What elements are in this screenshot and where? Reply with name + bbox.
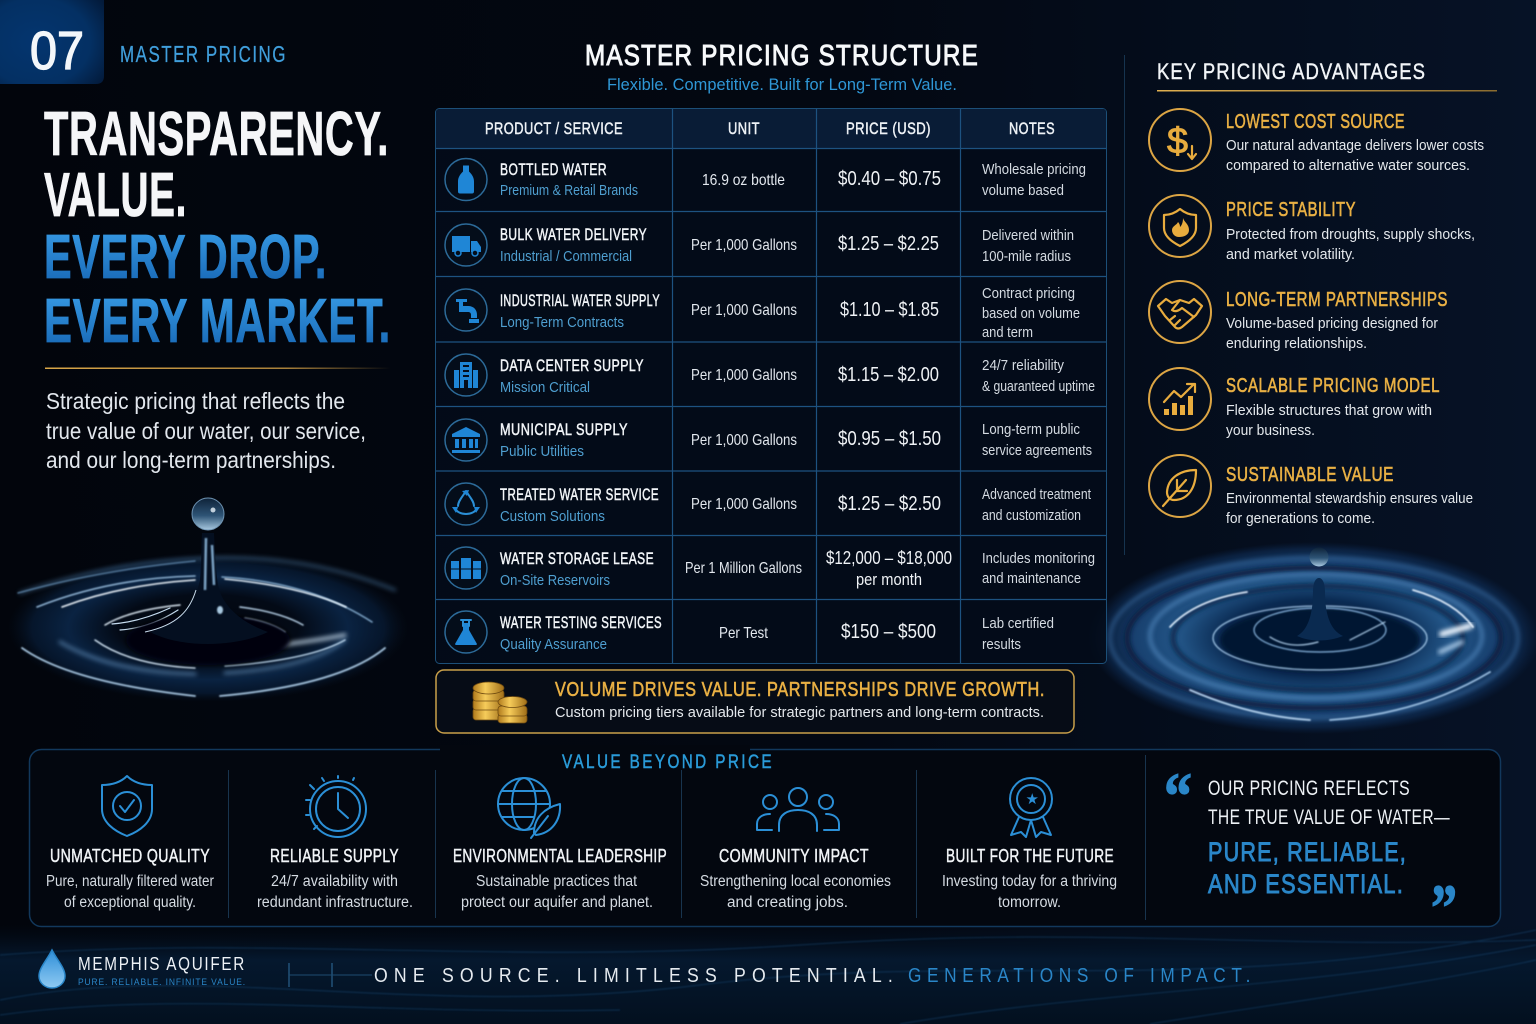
value: community impact: Strengthening local economies: [700, 873, 891, 890]
value: reliable supply: 24/7 availability with: [271, 873, 398, 890]
row: water testing services: Quality Assurance: [500, 636, 607, 653]
value: unmatched quality: Pure, naturally filtered water: [46, 873, 214, 890]
value: community impact: and creating jobs.: [727, 894, 848, 911]
row: data center supply: DATA CENTER SUPPLY: [500, 357, 644, 375]
advantage: lowest cost source: Our natural advantage delivers lower costs: [1226, 137, 1484, 154]
icon: gold coins: [473, 682, 527, 723]
callout: volume drives value: Custom pricing tiers available for strategic partners and long-term contracts.: [555, 704, 1044, 721]
footer logo: [39, 950, 246, 988]
intro paragraph: true value of our water, our service,: [46, 418, 366, 444]
intro paragraph: Strategic pricing that reflects the: [46, 388, 345, 414]
table header: UNIT: [728, 120, 760, 138]
main headline: VALUE.: [44, 161, 187, 230]
row: data center supply: $1.15 – $2.00: [838, 364, 939, 386]
advantage: price stability: [1149, 195, 1475, 263]
advantage: scalable pricing model: SCALABLE PRICING MODEL: [1226, 375, 1440, 397]
main headline: EVERY MARKET.: [44, 287, 391, 356]
row: bulk water delivery: 100-mile radius: [982, 249, 1071, 265]
row: water testing services: results: [982, 637, 1021, 653]
table header: PRICE (USD): [846, 120, 931, 138]
value: community impact: [700, 788, 891, 911]
row: municipal supply: [445, 419, 1092, 461]
row: municipal supply: service agreements: [982, 443, 1092, 459]
row: bulk water delivery: Industrial / Commercial: [500, 248, 632, 265]
footer tagline: ONE SOURCE. LIMITLESS POTENTIAL.: [374, 965, 899, 987]
row: water storage lease: $12,000 – $18,000: [826, 548, 952, 568]
row: industrial water supply: INDUSTRIAL WATER SUPPLY: [500, 292, 660, 310]
main headline: [44, 100, 391, 356]
row: data center supply: 24/7 reliability: [982, 358, 1065, 374]
row: treated water service: [445, 483, 1091, 525]
row: industrial water supply: $1.10 – $1.85: [840, 299, 939, 321]
row: water storage lease: [445, 547, 1095, 589]
section number badge: 07: [30, 21, 84, 81]
row: treated water service: Per 1,000 Gallons: [691, 496, 797, 513]
row: treated water service: $1.25 – $2.50: [838, 493, 941, 515]
row: bottled water: Premium & Retail Brands: [500, 182, 638, 199]
table header: [485, 120, 1055, 138]
quote: OUR PRICING REFLECTS: [1208, 777, 1410, 800]
callout: volume drives value: VOLUME DRIVES VALUE. PARTNERSHIPS DRIVE GROWTH.: [555, 679, 1045, 701]
row: water testing services: WATER TESTING SERVICES: [500, 614, 662, 632]
row: data center supply: [445, 354, 1095, 396]
value: built for the future: ★: [1026, 791, 1039, 808]
icon: globe and leaf: [498, 778, 560, 838]
panel: key pricing advantages: [1149, 59, 1497, 527]
center title: MASTER PRICING STRUCTURE: [585, 40, 979, 72]
value: unmatched quality: UNMATCHED QUALITY: [50, 846, 210, 866]
row: water storage lease: On-Site Reservoirs: [500, 572, 610, 589]
row: bulk water delivery: Per 1,000 Gallons: [691, 237, 797, 254]
panel: key pricing advantages: KEY PRICING ADVANTAGES: [1157, 59, 1426, 84]
icon: bottle: [445, 158, 487, 200]
value: environmental leadership: [453, 778, 667, 911]
advantage: long-term partnerships: enduring relationships.: [1226, 335, 1367, 352]
row: treated water service: Custom Solutions: [500, 508, 605, 525]
footer tagline: GENERATIONS OF IMPACT.: [908, 965, 1256, 987]
advantage: scalable pricing model: Flexible structures that grow with: [1226, 402, 1432, 419]
value: built for the future: [942, 778, 1117, 911]
row: industrial water supply: Per 1,000 Gallons: [691, 302, 797, 319]
row: data center supply: Per 1,000 Gallons: [691, 367, 797, 384]
intro paragraph: and our long-term partnerships.: [46, 447, 336, 473]
value: reliable supply: redundant infrastructure.: [257, 894, 413, 911]
row: water storage lease: Includes monitoring: [982, 551, 1095, 567]
advantage: long-term partnerships: Volume-based pricing designed for: [1226, 315, 1438, 332]
row: water storage lease: per month: [856, 570, 922, 589]
main headline: EVERY DROP.: [44, 223, 327, 292]
row: water testing services: $150 – $500: [841, 621, 936, 643]
row: water testing services: Per Test: [719, 625, 768, 642]
advantage: price stability: PRICE STABILITY: [1226, 199, 1356, 221]
callout: volume drives value: [436, 670, 1074, 733]
row: bottled water: BOTTLED WATER: [500, 161, 607, 179]
row: industrial water supply: [445, 286, 1080, 341]
row: treated water service: Advanced treatment: [982, 487, 1091, 503]
row: bulk water delivery: BULK WATER DELIVERY: [500, 226, 647, 244]
quote: THE TRUE VALUE OF WATER—: [1208, 806, 1450, 829]
row: water storage lease: and maintenance: [982, 571, 1081, 587]
advantage: lowest cost source: compared to alternative water sources.: [1226, 157, 1470, 174]
value: environmental leadership: protect our aquifer and planet.: [461, 894, 653, 911]
value: community impact: COMMUNITY IMPACT: [719, 846, 869, 866]
quote: AND ESSENTIAL.: [1208, 869, 1404, 899]
icon: shield check: [102, 776, 152, 836]
value: built for the future: Investing today for a thriving: [942, 873, 1117, 890]
center subtitle: Flexible. Competitive. Built for Long-Term Value.: [607, 75, 957, 94]
footer tagline: [374, 965, 1256, 987]
intro paragraph: [46, 388, 366, 473]
advantage: long-term partnerships: LONG-TERM PARTNERSHIPS: [1226, 289, 1448, 311]
row: water storage lease: WATER STORAGE LEASE: [500, 550, 654, 568]
panel: pricing table: [436, 108, 1106, 664]
section label: MASTER PRICING: [120, 41, 287, 67]
icon: truck: [445, 224, 487, 266]
icon: government building: [445, 419, 487, 461]
row: bottled water: 16.9 oz bottle: [702, 172, 785, 189]
image: water drop ripple left: [8, 498, 408, 732]
row: water storage lease: Per 1 Million Gallons: [685, 560, 802, 577]
advantage: sustainable value: for generations to come.: [1226, 510, 1375, 527]
icon: clock: [306, 776, 366, 837]
image: water drop ripple right: [1088, 542, 1536, 734]
row: bulk water delivery: $1.25 – $2.25: [838, 233, 939, 255]
quote: PURE, RELIABLE,: [1208, 837, 1407, 867]
value: environmental leadership: Sustainable practices that: [476, 873, 638, 890]
footer logo: PURE. RELIABLE. INFINITE VALUE.: [78, 977, 246, 988]
main headline: TRANSPARENCY.: [44, 100, 389, 169]
row: bottled water: volume based: [982, 183, 1064, 199]
row: data center supply: & guaranteed uptime: [982, 379, 1095, 395]
advantage: sustainable value: SUSTAINABLE VALUE: [1226, 464, 1394, 486]
row: municipal supply: $0.95 – $1.50: [838, 428, 941, 450]
icon: water cycle: [445, 483, 487, 525]
value: unmatched quality: of exceptional quality.: [64, 894, 196, 911]
row: industrial water supply: based on volume: [982, 306, 1080, 322]
icon: pipe: [445, 289, 487, 331]
row: bottled water: [445, 158, 1086, 200]
value: reliable supply: [257, 776, 413, 911]
section number badge: [0, 0, 104, 84]
icon: storage tanks: [445, 547, 487, 589]
value: unmatched quality: [46, 776, 214, 911]
icon: award ribbon: [1010, 778, 1052, 837]
footer logo: MEMPHIS AQUIFER: [78, 954, 246, 974]
value: reliable supply: RELIABLE SUPPLY: [270, 846, 399, 866]
row: industrial water supply: Contract pricing: [982, 286, 1075, 302]
row: data center supply: Mission Critical: [500, 379, 590, 396]
icon: building: [445, 354, 487, 396]
advantage: sustainable value: Environmental stewardship ensures value: [1226, 490, 1473, 507]
row: bottled water: Wholesale pricing: [982, 162, 1086, 178]
advantage: scalable pricing model: your business.: [1226, 422, 1315, 439]
row: industrial water supply: Long-Term Contracts: [500, 314, 624, 331]
row: bulk water delivery: [445, 224, 1074, 266]
table header: PRODUCT / SERVICE: [485, 120, 623, 138]
advantage: lowest cost source: $: [1167, 120, 1188, 161]
row: water testing services: Lab certified: [982, 616, 1054, 632]
advantage: price stability: Protected from droughts, supply shocks,: [1226, 226, 1475, 243]
value: built for the future: BUILT FOR THE FUTURE: [946, 846, 1114, 866]
advantage: scalable pricing model: [1149, 368, 1440, 439]
value: environmental leadership: ENVIRONMENTAL LEADERSHIP: [453, 846, 667, 866]
advantage: price stability: and market volatility.: [1226, 246, 1355, 263]
row: municipal supply: MUNICIPAL SUPPLY: [500, 421, 628, 439]
row: bulk water delivery: Delivered within: [982, 228, 1074, 244]
row: municipal supply: Long-term public: [982, 422, 1080, 438]
icon: logo drop: [39, 950, 65, 988]
quote: “: [1164, 760, 1192, 833]
quote: ”: [1431, 872, 1457, 945]
advantage: sustainable value: [1149, 455, 1473, 527]
advantage: long-term partnerships: [1149, 281, 1448, 352]
row: water testing services: [445, 611, 1054, 653]
heading: VALUE BEYOND PRICE: [562, 752, 774, 773]
row: industrial water supply: and term: [982, 325, 1033, 341]
icon: people: [757, 788, 839, 831]
row: treated water service: TREATED WATER SERVICE: [500, 486, 659, 504]
row: municipal supply: Public Utilities: [500, 443, 584, 460]
row: treated water service: and customization: [982, 508, 1081, 524]
table header: NOTES: [1009, 120, 1055, 138]
quote: [1164, 760, 1457, 945]
icon: flask: [445, 611, 487, 653]
panel: value beyond price: [30, 745, 1500, 945]
row: bottled water: $0.40 – $0.75: [838, 168, 941, 190]
advantage: lowest cost source: LOWEST COST SOURCE: [1226, 111, 1405, 133]
advantage: lowest cost source: [1149, 109, 1484, 174]
row: municipal supply: Per 1,000 Gallons: [691, 432, 797, 449]
value: built for the future: tomorrow.: [998, 894, 1061, 911]
